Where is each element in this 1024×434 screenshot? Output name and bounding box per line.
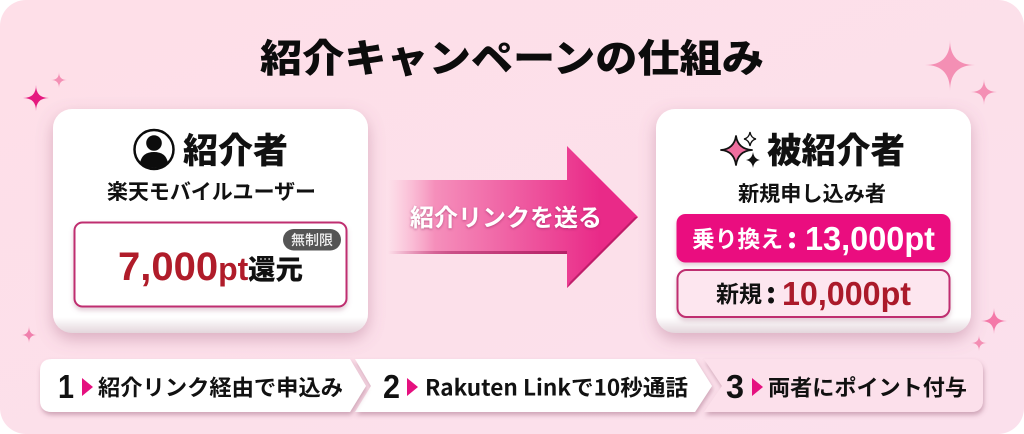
step 3	[704, 359, 983, 412]
reward bar: switch: 13,000pt	[805, 220, 935, 257]
reward amount: 7,000pt	[118, 245, 249, 289]
icon: person	[134, 130, 174, 169]
heading: referred: 被紹介者	[767, 123, 905, 174]
subheading: referrer: 楽天モバイルユーザー	[107, 176, 316, 206]
step 3: 3	[726, 368, 744, 405]
badge: unlimited	[283, 229, 341, 250]
reward bar: switch: :	[787, 217, 797, 257]
reward bar: new: 新規	[716, 275, 762, 309]
heading: referrer: 紹介者	[183, 123, 288, 174]
step 1: 1	[58, 368, 74, 405]
panel: referred	[656, 109, 971, 333]
icon: sparkles	[721, 132, 760, 168]
step 1: 紹介リンク経由で申込み	[98, 370, 343, 402]
reward label: 還元	[248, 247, 303, 287]
step 3: 両者にポイント付与	[768, 370, 967, 402]
step 2	[355, 359, 712, 412]
sparkles: left	[21, 72, 67, 343]
badge: unlimited: 無制限	[291, 230, 333, 250]
reward bar: switch: 乗り換え	[692, 220, 783, 254]
arrow label: 紹介リンクを送る	[410, 198, 602, 233]
reward bar: new: :	[766, 272, 776, 312]
step 2: 2	[383, 368, 400, 405]
reward bar: switch	[676, 214, 950, 262]
step 1	[40, 359, 366, 412]
sparkles: right	[925, 40, 1007, 351]
subheading: referred: 新規申し込み者	[738, 178, 886, 208]
step 2: Rakuten Linkで10秒通話	[425, 370, 688, 402]
arrow	[388, 146, 638, 288]
reward bar: new	[678, 270, 950, 317]
panel: referrer	[53, 109, 368, 333]
reward box: referrer	[74, 222, 346, 306]
reward bar: new: 10,000pt	[782, 275, 911, 312]
title: 紹介キャンペーンの仕組み	[260, 28, 764, 84]
